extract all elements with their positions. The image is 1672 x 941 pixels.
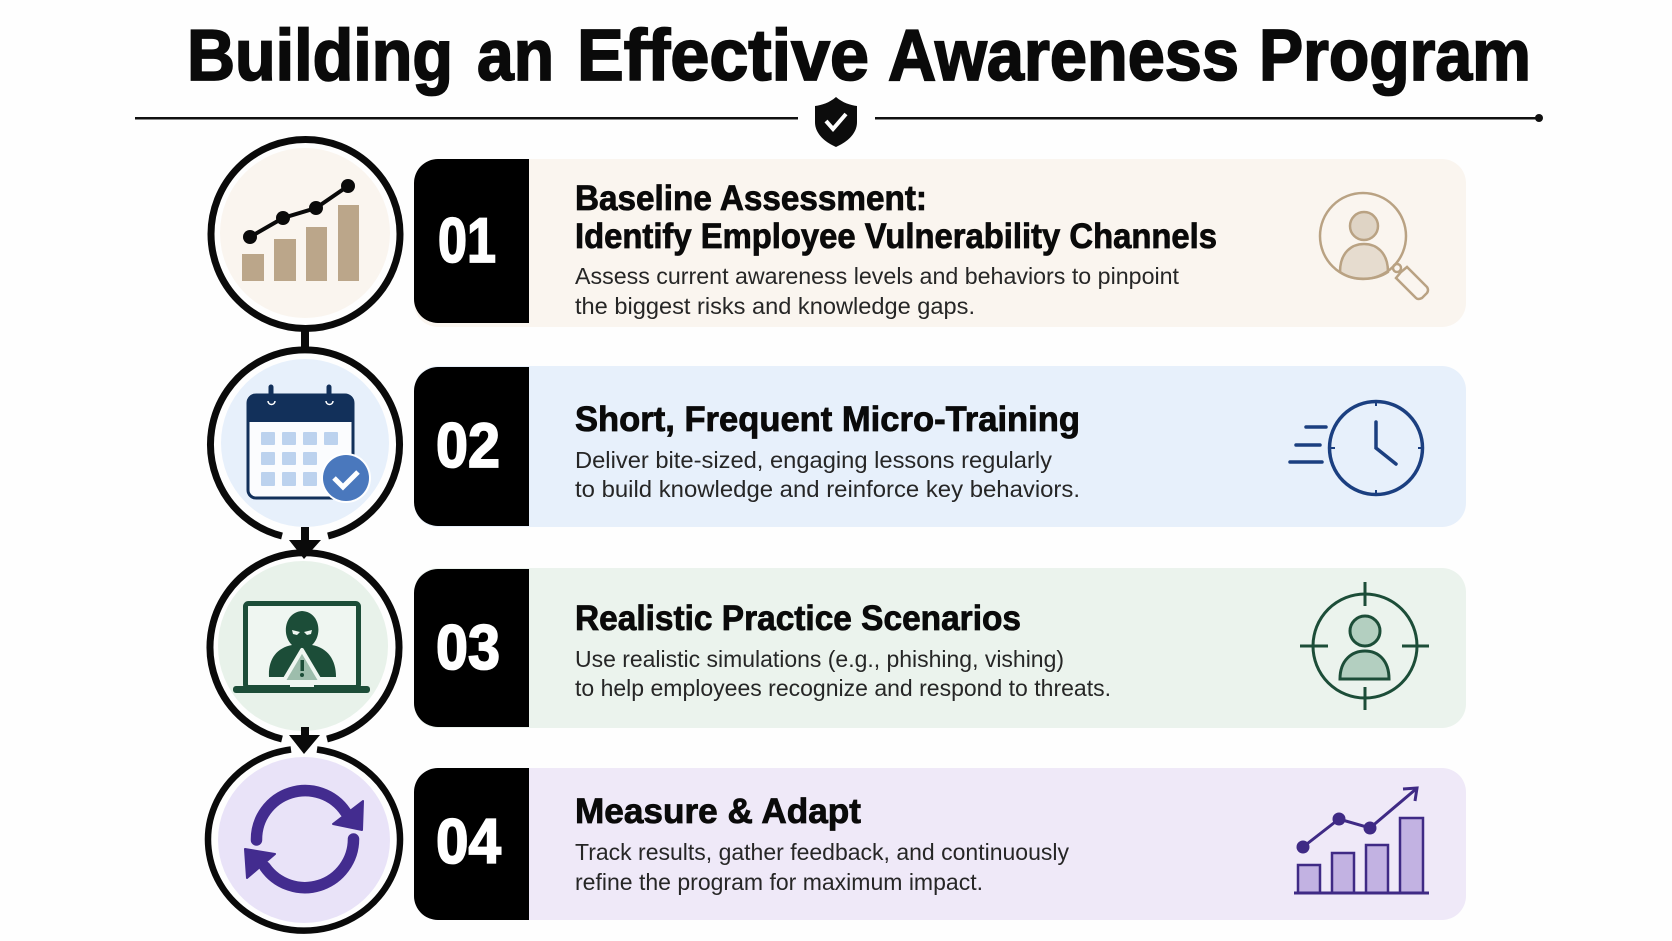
number badge 03: 03 [436, 613, 500, 683]
arrow 3 to 4 [289, 727, 320, 754]
heading [575, 179, 1217, 256]
title: Building [187, 16, 453, 96]
description [575, 263, 1180, 319]
description [575, 646, 1111, 701]
icon: growth chart [1294, 788, 1429, 893]
heading: Realistic Practice Scenarios [575, 599, 1021, 638]
heading: Baseline Assessment: [575, 179, 927, 218]
description: the biggest risks and knowledge gaps. [575, 293, 975, 319]
description [575, 839, 1069, 895]
description: Assess current awareness levels and behaviors to pinpoint [575, 263, 1180, 289]
number badge 02: 02 [436, 411, 500, 481]
step 4 circle [208, 750, 400, 931]
step 1 circle [211, 140, 400, 328]
number badge 01 [414, 159, 529, 323]
description [575, 447, 1080, 502]
divider with shield [135, 97, 1543, 147]
timeline connector 1 to 2 [301, 330, 309, 350]
title [187, 16, 1531, 96]
panel: step 2 micro-training [414, 366, 1466, 527]
icon: shield check [815, 97, 857, 147]
heading: Short, Frequent Micro-Training [575, 400, 1080, 439]
icon: laptop with hacker and warning [233, 604, 370, 693]
heading: Measure & Adapt [575, 792, 861, 831]
arrow 2 to 3 [289, 527, 321, 559]
description: Deliver bite-sized, engaging lessons regularly [575, 447, 1053, 473]
panel: step 3 practice scenarios [414, 568, 1466, 728]
icon: sync arrows [245, 791, 363, 888]
panel: step 4 measure and adapt [414, 768, 1466, 920]
description: Use realistic simulations (e.g., phishing, vishing) [575, 646, 1064, 672]
number badge 03 [414, 569, 529, 727]
icon: fast clock [1290, 402, 1423, 494]
title: Program [1259, 16, 1531, 96]
number badge 01: 01 [438, 206, 496, 276]
number badge 04 [414, 768, 529, 920]
step 2 circle [210, 350, 400, 536]
icon: person in target [1300, 582, 1429, 710]
description: Track results, gather feedback, and continuously [575, 839, 1069, 865]
title: an [477, 16, 554, 96]
heading: Identify Employee Vulnerability Channels [575, 217, 1217, 256]
step 3 circle [210, 553, 399, 739]
number badge 04: 04 [436, 807, 501, 877]
icon: calendar with check [247, 387, 371, 503]
icon: bar chart with trend line [242, 179, 359, 281]
panel: step 1 baseline assessment [414, 159, 1466, 327]
title: Awareness [888, 16, 1239, 96]
title: Effective [577, 16, 869, 96]
description: to help employees recognize and respond to threats. [575, 675, 1111, 701]
description: to build knowledge and reinforce key behaviors. [575, 476, 1080, 502]
number badge 02 [414, 367, 529, 526]
icon: person under magnifier [1320, 193, 1428, 299]
description: refine the program for maximum impact. [575, 869, 983, 895]
